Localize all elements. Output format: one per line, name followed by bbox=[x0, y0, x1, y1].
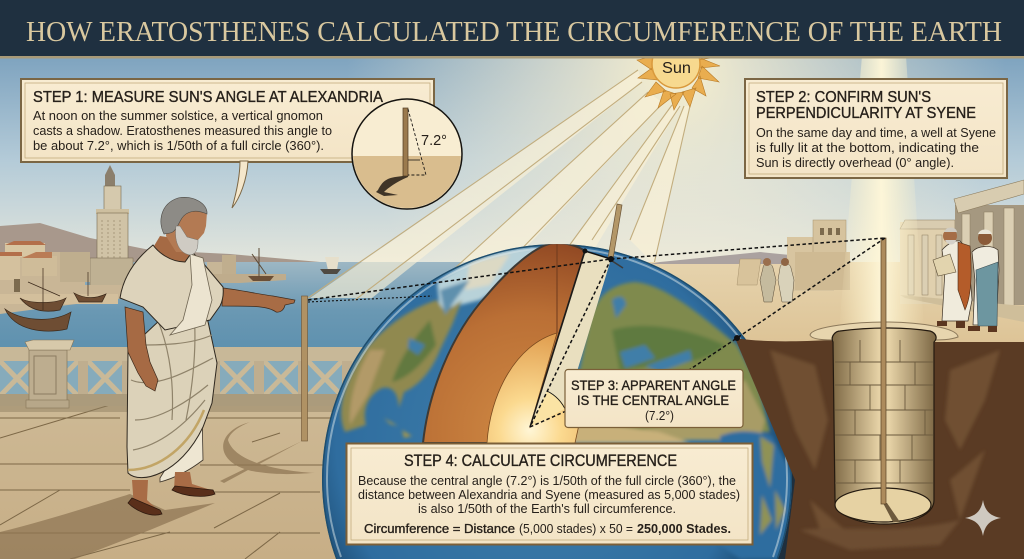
step 3 heading: (7.2°) bbox=[645, 408, 674, 423]
step 1 body text: At noon on the summer solstice, a vertical gnomon bbox=[33, 108, 323, 123]
step 4 body text bbox=[358, 473, 740, 516]
circumference formula: (5,000 stades) x 50 = bbox=[519, 521, 633, 536]
panel: step 2 bbox=[745, 79, 1007, 178]
Syene well cross-section bbox=[735, 322, 1024, 559]
Eurasia bbox=[560, 282, 770, 440]
terrace balustrade bbox=[0, 347, 380, 412]
step 4 body text: distance between Alexandria and Syene (measured as 5,000 stades) bbox=[358, 487, 740, 502]
angle label: 7.2° bbox=[421, 132, 447, 149]
gnomon at Alexandria bbox=[302, 296, 308, 441]
step 1 body text: casts a shadow. Eratosthenes measured this angle to bbox=[33, 123, 332, 138]
step 4 heading: STEP 4: CALCULATE CIRCUMFERENCE bbox=[404, 452, 677, 470]
sky background bbox=[0, 56, 1024, 266]
step 2 heading: STEP 2: CONFIRM SUN'S bbox=[756, 89, 931, 106]
lower tunic bbox=[160, 410, 203, 482]
magnified gnomon inset bbox=[350, 99, 465, 211]
core bbox=[487, 333, 580, 443]
desert ground at Syene bbox=[640, 252, 1024, 352]
panel: step 3 bbox=[565, 370, 743, 428]
balustrade pedestal bbox=[25, 340, 74, 408]
hair bbox=[161, 197, 207, 234]
Syene temple bbox=[900, 180, 1024, 322]
overhead beam of sunlight bbox=[838, 56, 925, 342]
toga drape bbox=[127, 253, 217, 478]
terrace floor bbox=[0, 400, 420, 559]
sight line nodes bbox=[582, 248, 740, 341]
step 3 heading: IS THE CENTRAL ANGLE bbox=[577, 392, 729, 408]
step 3 heading bbox=[571, 377, 736, 423]
continents bbox=[341, 248, 795, 559]
step 2 body text: is fully lit at the bottom, indicating the bbox=[756, 140, 979, 155]
central angle wedge bbox=[530, 251, 611, 427]
head bbox=[166, 207, 207, 252]
atmosphere rim bbox=[322, 244, 792, 559]
circumference formula: Circumference = Distance bbox=[364, 521, 515, 536]
harbour buildings bbox=[0, 241, 125, 314]
shadows on the floor bbox=[0, 422, 315, 559]
step 2 heading bbox=[756, 89, 976, 122]
Caribbean islands bbox=[384, 418, 412, 438]
step 4 body text: is also 1/50th of the Earth's full circumference. bbox=[418, 501, 676, 516]
title bar bbox=[0, 0, 1024, 58]
white sash bbox=[170, 254, 212, 335]
distant hills and sea bbox=[0, 223, 520, 402]
moored ships bbox=[5, 268, 106, 331]
Earth globe bbox=[322, 243, 795, 559]
circumference formula bbox=[364, 521, 731, 536]
mantle cutaway bbox=[423, 243, 585, 443]
legs and sandals bbox=[128, 472, 215, 515]
step 2 body text: On the same day and time, a well at Syene bbox=[756, 125, 996, 140]
lighthouse of Alexandria bbox=[90, 165, 133, 286]
far harbour fort and boats bbox=[200, 248, 341, 283]
left arm bbox=[125, 307, 158, 391]
sun rays bbox=[308, 70, 690, 300]
title: HOW ERATOSTHENES CALCULATED THE CIRCUMFERENCE OF THE EARTH bbox=[26, 16, 1002, 48]
step 2 heading: PERPENDICULARITY AT SYENE bbox=[756, 105, 976, 122]
neck bbox=[154, 236, 190, 264]
small distant figures bbox=[760, 258, 794, 302]
panel: step 4 bbox=[346, 444, 752, 544]
Eratosthenes bbox=[120, 197, 295, 515]
pointing arm bbox=[222, 288, 295, 312]
Syene scholars bbox=[933, 228, 999, 332]
panel: step 1 bbox=[21, 79, 434, 208]
step 1 heading: STEP 1: MEASURE SUN'S ANGLE AT ALEXANDRIA bbox=[33, 89, 383, 106]
ocean bbox=[322, 244, 792, 559]
step 2 body text bbox=[756, 125, 996, 170]
circumference formula: 250,000 Stades. bbox=[637, 521, 731, 536]
Indian ocean coast bbox=[720, 431, 795, 559]
Syene mud-brick buildings bbox=[737, 220, 850, 291]
sun glow bbox=[250, 56, 1024, 356]
vertical pole in the well bbox=[881, 238, 886, 504]
North America bbox=[341, 300, 462, 432]
step 1 body text: be about 7.2°, which is 1/50th of a full circle (360°). bbox=[33, 138, 324, 153]
step 1 body text bbox=[33, 108, 332, 153]
speech bubble tail bbox=[232, 161, 248, 208]
gnomon on the globe bbox=[606, 204, 623, 268]
sun label: Sun bbox=[662, 60, 691, 77]
beard bbox=[176, 226, 198, 255]
sparkle watermark bbox=[965, 500, 1001, 536]
tunic top bbox=[120, 245, 223, 330]
sun bbox=[637, 40, 720, 110]
icy north bbox=[437, 248, 540, 310]
step 3 heading: STEP 3: APPARENT ANGLE bbox=[571, 377, 736, 393]
step 2 body text: Sun is directly overhead (0° angle). bbox=[756, 155, 954, 170]
geometric sight lines bbox=[308, 238, 885, 427]
step 4 body text: Because the central angle (7.2°) is 1/50th of the full circle (360°), the bbox=[358, 473, 736, 488]
